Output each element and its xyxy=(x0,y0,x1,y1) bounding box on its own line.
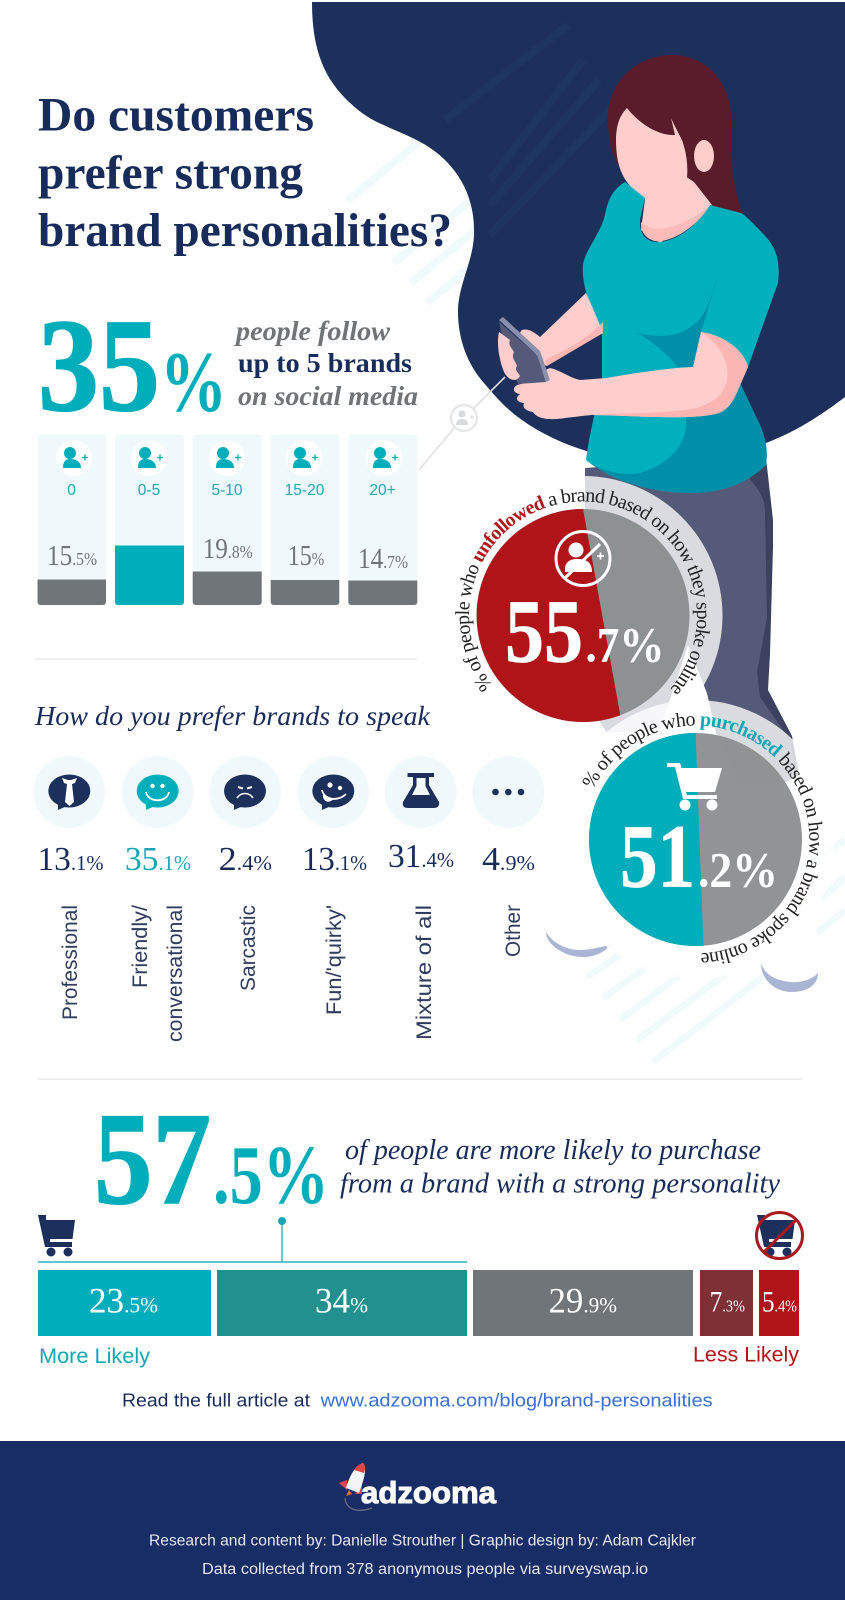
value: 51.2%: 51 xyxy=(620,808,695,906)
option: sarcastic xyxy=(209,756,281,991)
segment: 7.3% xyxy=(700,1270,753,1336)
call to action: read the full article xyxy=(122,1390,713,1411)
option: professional xyxy=(33,756,105,1020)
figure phone xyxy=(498,317,550,384)
figure face and neck xyxy=(616,108,714,243)
bar: 20+ brands: 20+ xyxy=(369,482,396,499)
bar: 15-20 brands xyxy=(271,434,339,605)
option: sarcastic: Sarcastic xyxy=(237,905,260,991)
segment: 34% xyxy=(217,1270,467,1336)
bar: 15-20 brands: 15% xyxy=(288,540,324,572)
panel: brands followed bars xyxy=(38,434,417,605)
circular stat: unfollowed 55.7 percent: .7% xyxy=(586,616,664,672)
footer credits: Data collected from 378 anonymous people via surveyswap.io xyxy=(202,1561,648,1578)
figure shirt xyxy=(583,182,779,493)
value: 55.7%: 55 xyxy=(505,582,583,682)
segment: 29.9% xyxy=(473,1270,693,1336)
option: fun quirky: 13.1% xyxy=(302,841,367,878)
option: mixture of all: Mixture of all xyxy=(413,905,436,1040)
figure trousers xyxy=(585,458,799,785)
option: fun quirky: Fun/'quirky' xyxy=(323,905,346,1015)
bar: 0-5 brands: 0-5 xyxy=(138,482,160,499)
option: friendly conversational: 35.1% xyxy=(125,841,191,878)
bar: 5-10 brands: 5-10 xyxy=(211,482,243,499)
bar: 0 brands: 15.5% xyxy=(47,540,97,572)
stat: 57.5 percent: of people are more likely to purchase xyxy=(345,1135,761,1166)
option: mixture of all: 31.4% xyxy=(388,838,454,875)
circular stat: unfollowed 55.7 percent: % of people who unfollowed a brand based on how they spoke online xyxy=(455,488,710,694)
stacked bar: likelihood to purchase xyxy=(38,1270,799,1336)
circular stat: purchased 51.2 percent: .2% xyxy=(698,842,778,898)
icon: shopping cart xyxy=(667,763,722,810)
option: mixture of all xyxy=(385,756,457,1040)
option: other: Other xyxy=(502,905,525,957)
figure shoes xyxy=(546,780,818,992)
call to action: read the full article: www.adzooma.com/blog/brand-personalities xyxy=(320,1390,713,1411)
figure arms xyxy=(514,293,748,419)
segment: 34%: 34% xyxy=(315,1281,368,1321)
icon: unfollow user xyxy=(556,532,610,586)
footer panel xyxy=(0,1441,845,1600)
bar: 0-5 brands xyxy=(115,434,184,605)
option: friendly conversational: Friendly/ xyxy=(129,905,152,988)
option: fun quirky xyxy=(297,756,369,1015)
stat: 35 percent: people follow xyxy=(234,316,391,346)
option: professional: Professional xyxy=(59,905,82,1020)
stat: 57.5 percent xyxy=(94,1085,781,1232)
bar: 5-10 brands xyxy=(193,434,262,605)
title: brand personalities? xyxy=(38,205,452,257)
curved caption: unfollowed xyxy=(469,501,697,696)
footer credits xyxy=(149,1533,696,1578)
bar: 20+ brands: 14.7% xyxy=(358,543,408,575)
stat: 35 percent: on social media xyxy=(238,381,418,411)
curved caption: purchased xyxy=(593,725,809,953)
bar: 0 brands xyxy=(38,434,106,605)
bar: 20+ brands xyxy=(348,434,417,605)
stripes on navy blob xyxy=(445,25,615,235)
heading: how do you prefer brands to speak: How do you prefer brands to speak xyxy=(34,701,431,731)
connector with small user icon xyxy=(419,377,505,470)
logo: adzooma rocket: adzooma xyxy=(361,1475,497,1510)
option: other: 4.9% xyxy=(482,841,535,878)
segment: 23.5% xyxy=(38,1270,211,1336)
label: more likely: More Likely xyxy=(39,1345,151,1368)
stat: 57.5 percent: from a brand with a strong personality xyxy=(340,1169,781,1200)
call to action: read the full article: Read the full article at xyxy=(122,1390,310,1411)
title: prefer strong xyxy=(38,148,303,200)
segment: 5.4% xyxy=(759,1270,799,1336)
option: other xyxy=(472,756,544,957)
figure hair xyxy=(608,55,743,222)
logo: adzooma rocket xyxy=(339,1463,497,1510)
circular stat: purchased 51.2 percent: % of people who purchased based on how a brand spoke online xyxy=(582,712,822,964)
marker line above more likely bars xyxy=(38,1217,467,1262)
stat: 35 percent: % xyxy=(160,334,227,430)
illustration: woman holding phone xyxy=(498,55,818,992)
stat: 35 percent xyxy=(38,291,418,439)
option: friendly conversational xyxy=(122,756,194,1042)
stat: 35 percent: up to 5 brands xyxy=(238,348,412,378)
footer credits: Research and content by: Danielle Strouther | Graphic design by: Adam Cajkler xyxy=(149,1533,696,1550)
stat: 57.5 percent: .5% xyxy=(213,1129,329,1222)
option: friendly conversational: conversational xyxy=(164,905,187,1042)
stat: 35 percent: 35 xyxy=(38,291,160,439)
panel: speaking style options xyxy=(33,756,544,1042)
option: professional: 13.1% xyxy=(38,841,104,878)
navy background blob xyxy=(312,2,845,452)
bar: 15-20 brands: 15-20 xyxy=(285,482,325,499)
bar: 0 brands: 0 xyxy=(67,482,76,499)
icon: cart more likely xyxy=(38,1215,75,1256)
title xyxy=(38,90,452,257)
segment: 7.3%: 7.3% xyxy=(710,1286,745,1319)
title: Do customers xyxy=(38,90,314,142)
segment: 29.9%: 29.9% xyxy=(548,1281,617,1321)
label: less likely: Less Likely xyxy=(693,1344,800,1367)
stripes on white background xyxy=(347,100,845,1062)
option: sarcastic: 2.4% xyxy=(219,841,272,878)
stat: 57.5 percent: 57 xyxy=(94,1085,211,1232)
bar: 5-10 brands: 19.8% xyxy=(203,533,253,565)
segment: 23.5%: 23.5% xyxy=(89,1281,158,1321)
segment: 5.4%: 5.4% xyxy=(762,1286,797,1319)
icon: cart less likely xyxy=(756,1212,802,1258)
